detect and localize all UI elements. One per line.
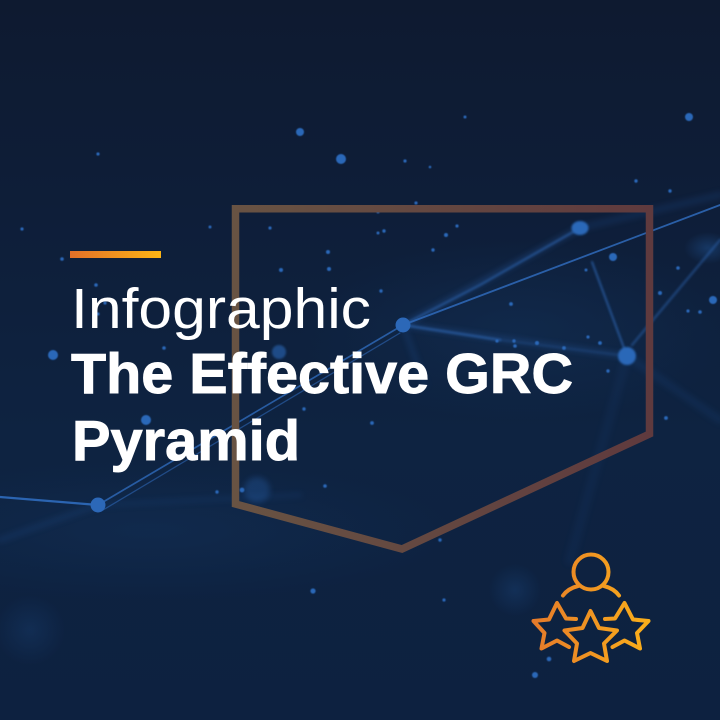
accent bar xyxy=(70,251,161,258)
star-field dots xyxy=(20,116,702,678)
icon: person with three stars xyxy=(534,554,648,661)
network nodes xyxy=(48,113,717,512)
network lines xyxy=(0,195,720,560)
icon: centre star xyxy=(564,611,617,661)
icon: left star xyxy=(534,603,576,648)
title line: Infographic: Infographic xyxy=(71,277,371,341)
icon: right star xyxy=(605,603,648,648)
title line: Pyramid: Pyramid xyxy=(72,409,300,473)
title xyxy=(71,277,573,473)
icon: person shoulders xyxy=(563,586,619,596)
title line: The Effective GRC: The Effective GRC xyxy=(71,342,573,406)
icon: person head xyxy=(574,554,608,590)
frame: pentagon outline xyxy=(236,209,650,549)
